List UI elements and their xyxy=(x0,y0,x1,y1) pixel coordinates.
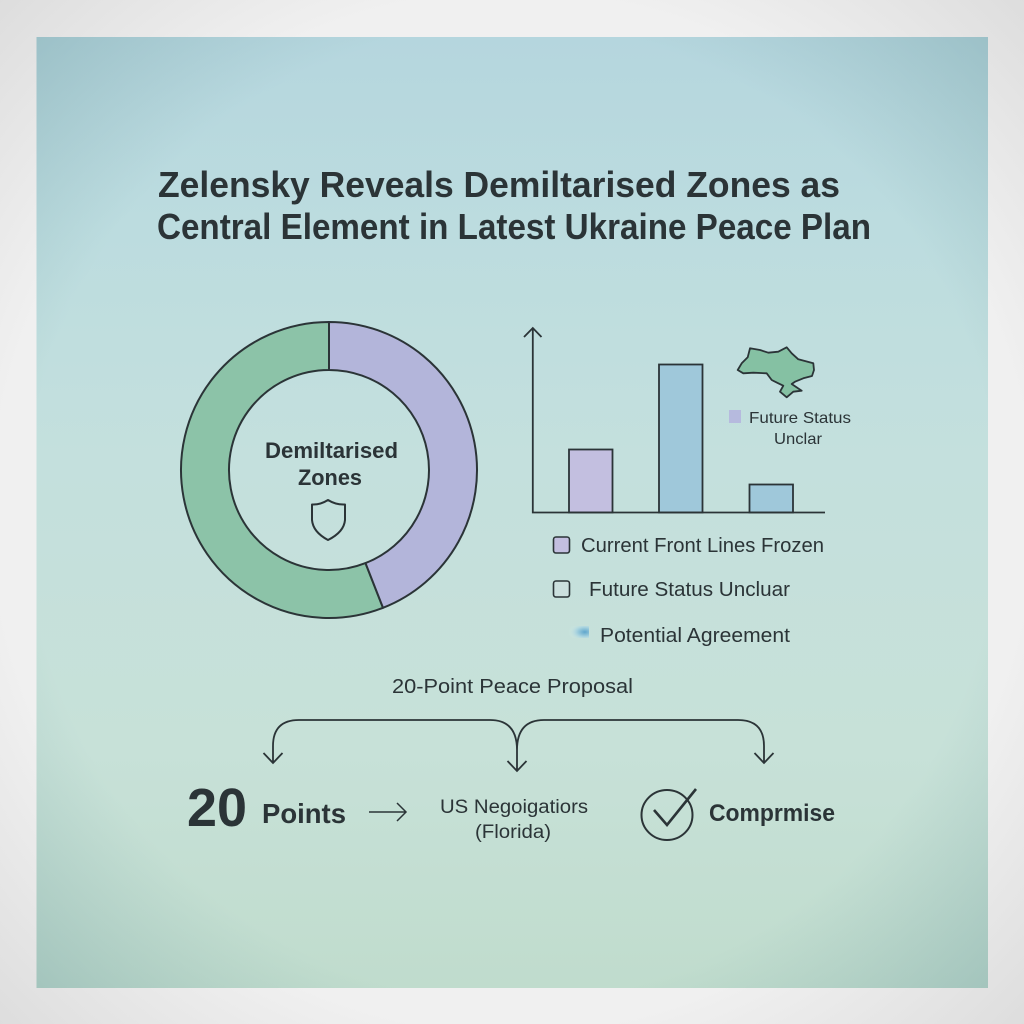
donut centre label xyxy=(265,438,398,490)
stat: 20 points xyxy=(187,778,346,838)
legend item: current front lines: Current Front Lines Frozen xyxy=(581,535,824,557)
text: US negotiators: US Negoigatiors xyxy=(440,797,588,818)
stat: 20 points: 20 xyxy=(187,778,247,838)
note swatch xyxy=(729,410,741,423)
stat: 20 points: Points xyxy=(262,798,346,829)
branching arrows xyxy=(264,720,774,771)
arrow: points to negotiators xyxy=(369,803,406,821)
proposal heading: 20-Point Peace Proposal xyxy=(392,676,633,698)
legend xyxy=(554,535,824,647)
donut centre label: Zones xyxy=(298,465,362,490)
legend item: future status: Future Status Uncluar xyxy=(589,579,790,601)
icon: shield xyxy=(312,500,345,540)
bar: lavender xyxy=(569,450,612,512)
map note: future status xyxy=(729,410,851,448)
legend item: potential agreement: Potential Agreement xyxy=(600,625,790,647)
text: US negotiators: (Florida) xyxy=(475,822,551,843)
donut chart xyxy=(181,322,477,618)
text: US negotiators xyxy=(440,797,588,843)
donut segment: green xyxy=(181,322,383,618)
note text xyxy=(749,410,851,448)
bar: short blue xyxy=(750,484,793,512)
icon: check mark in circle xyxy=(642,789,696,840)
text: compromise: Comprmise xyxy=(709,800,835,827)
note text: Unclar xyxy=(774,431,823,448)
title: Central Element in Latest Ukraine Peace Plan xyxy=(157,206,871,247)
icon: Ukraine map xyxy=(738,347,814,397)
donut centre label: Demiltarised xyxy=(265,438,398,463)
chart axes xyxy=(524,328,825,512)
title xyxy=(157,164,871,247)
title: Zelensky Reveals Demiltarised Zones as xyxy=(158,164,840,205)
bar: tall blue xyxy=(659,364,702,512)
note text: Future Status xyxy=(749,410,851,427)
bar chart xyxy=(524,328,825,512)
donut segment: lavender xyxy=(329,322,477,608)
